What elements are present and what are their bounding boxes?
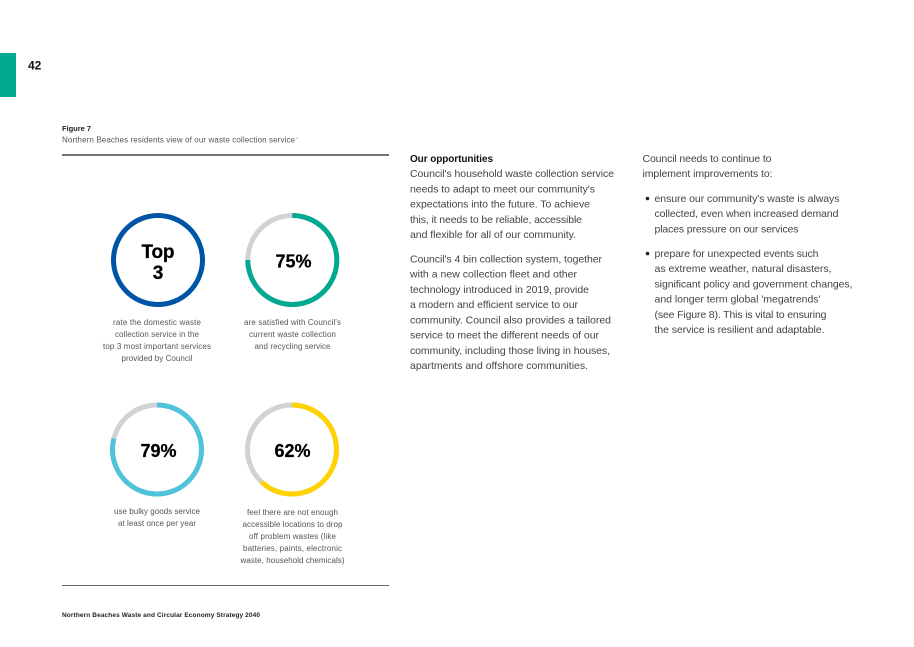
caption: 79%: use bulky goods service <box>114 507 201 516</box>
caption: 62% <box>240 508 345 565</box>
caption: 79%: at least once per year <box>118 519 196 528</box>
bullet: prepare for unexpected events: the service is resilient and adaptable. <box>654 324 824 336</box>
caption: 75%: are satisfied with Council's <box>244 318 341 327</box>
text block: intro to improvements: implement improvements to: <box>642 168 772 180</box>
bullet: prepare for unexpected events <box>646 248 852 336</box>
figure heading: Figure 7 <box>62 124 91 133</box>
caption: top 3: rate the domestic waste <box>113 318 202 327</box>
caption: 75%: current waste collection <box>249 330 336 339</box>
text block: opportunities paragraph 2: community. Council also provides a tailored <box>410 314 611 326</box>
bullet: ensure waste collected: places pressure on our services <box>654 223 798 235</box>
caption: 62%: feel there are not enough <box>247 508 338 517</box>
caption: 75% <box>244 318 341 351</box>
donut: top 3 <box>114 216 202 304</box>
text block: opportunities paragraph 1: Council's household waste collection service <box>410 168 614 180</box>
bullet: ensure waste collected: collected, even when increased demand <box>654 208 839 220</box>
donut: 75% <box>248 216 337 304</box>
value: top 3: Top <box>142 242 174 263</box>
value: 79%: 79% <box>140 441 176 461</box>
text block: opportunities paragraph 1: and flexible for all of our community. <box>410 229 576 241</box>
caption: 62%: waste, household chemicals) <box>240 556 345 565</box>
value: 75%: 75% <box>276 252 312 272</box>
text block: opportunities paragraph 2: Council's 4 bin collection system, together <box>410 253 602 265</box>
caption: top 3: provided by Council <box>122 354 193 363</box>
panel: 79% stat <box>112 405 202 528</box>
value: top 3: 3 <box>153 263 163 284</box>
bullet: prepare for unexpected events: and longer term global 'megatrends' <box>654 294 820 306</box>
text block: opportunities paragraph 1 <box>410 168 614 241</box>
caption: 79% <box>114 507 201 528</box>
bullet: ensure waste collected <box>646 193 840 235</box>
text block: opportunities paragraph 2: a modern and efficient service to our <box>410 299 578 311</box>
panel: 62% stat <box>240 405 345 565</box>
panel: 75% stat <box>244 216 341 351</box>
caption: 62%: batteries, paints, electronic <box>243 544 342 553</box>
text block: opportunities paragraph 1: this, it needs to be reliable, accessible <box>410 214 582 226</box>
caption: 62%: off problem wastes (like <box>249 532 337 541</box>
figure heading <box>62 124 298 144</box>
bullet: prepare for unexpected events: prepare for unexpected events such <box>654 248 819 260</box>
donut: 62% <box>248 405 336 494</box>
page tab <box>0 53 16 97</box>
figure heading: * <box>296 137 298 143</box>
text block: intro to improvements: Council needs to continue to <box>642 153 772 165</box>
text block: opportunities paragraph 2: community, including those living in houses, <box>410 345 610 357</box>
text block: opportunities paragraph 2: service to meet the different needs of our <box>410 330 600 342</box>
figure heading: Northern Beaches residents view of our waste collection service <box>62 136 296 144</box>
caption: top 3: top 3 most important services <box>103 342 211 351</box>
caption: 62%: accessible locations to drop <box>242 520 343 529</box>
text block: opportunities paragraph 2: apartments and offshore communities. <box>410 360 588 372</box>
donut: 79% <box>112 405 202 494</box>
caption: 75%: and recycling service <box>254 342 331 351</box>
value: top 3 <box>142 242 174 284</box>
text block: opportunities paragraph 2: technology introduced in 2019, provide <box>410 284 589 296</box>
caption: top 3 <box>103 318 211 363</box>
bullet: ensure waste collected: ensure our community's waste is always <box>654 193 840 205</box>
text block: intro to improvements <box>642 153 772 180</box>
footer: Northern Beaches Waste and Circular Economy Strategy 2040 <box>62 612 260 619</box>
text block: opportunities paragraph 2 <box>409 253 611 372</box>
value: 62%: 62% <box>274 441 310 461</box>
heading: our opportunities: Our opportunities <box>410 154 493 165</box>
panel: top 3 stat <box>103 216 211 363</box>
bullet: prepare for unexpected events: as extreme weather, natural disasters, <box>654 263 832 275</box>
bullet: prepare for unexpected events: significant policy and government changes, <box>654 278 852 290</box>
page number: 42 <box>28 58 42 72</box>
bullet: prepare for unexpected events: (see Figure 8). This is vital to ensuring <box>654 309 827 321</box>
text block: opportunities paragraph 1: needs to adapt to meet our community's <box>410 183 595 195</box>
text block: opportunities paragraph 1: expectations into the future. To achieve <box>410 198 590 210</box>
text block: opportunities paragraph 2: with a new collection fleet and other <box>409 268 578 280</box>
caption: top 3: collection service in the <box>115 330 200 339</box>
